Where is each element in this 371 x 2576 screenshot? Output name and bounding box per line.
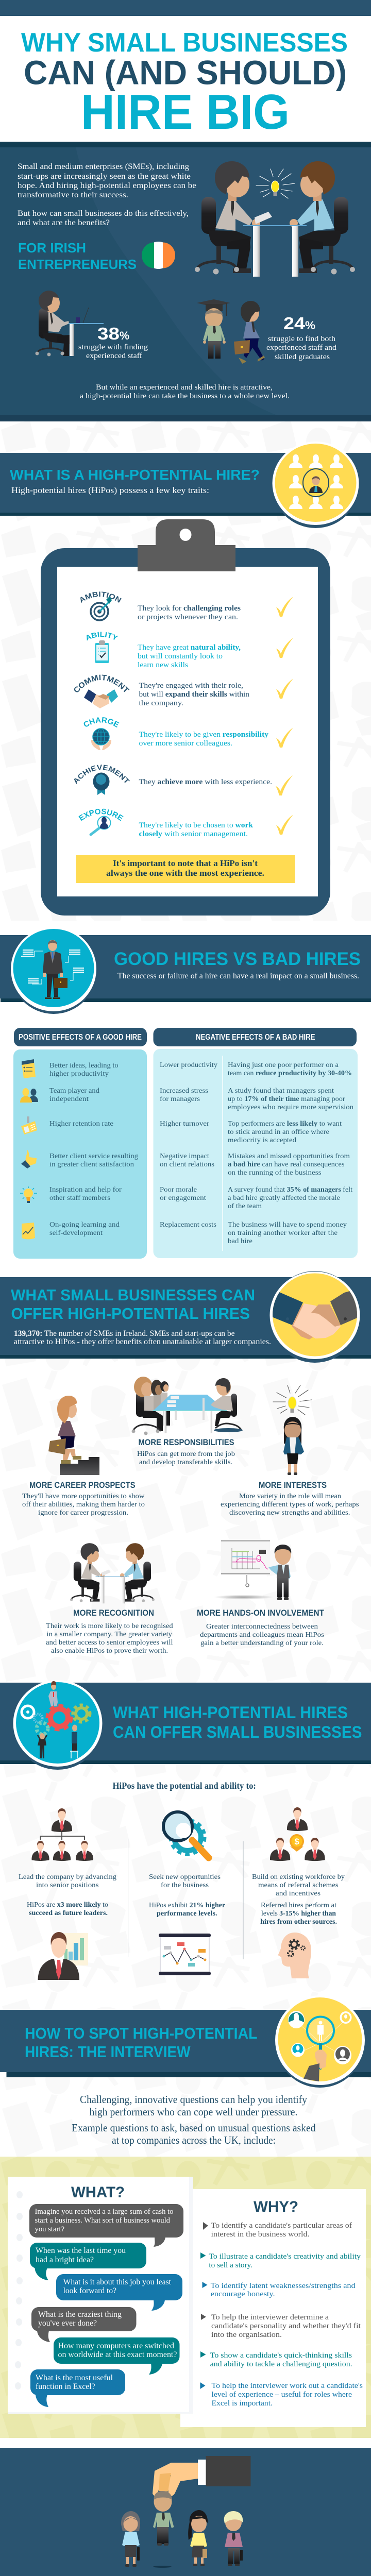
text block: more responsibilities: and develop transferable skills. [139,1459,232,1466]
text block: more recognition [46,1608,173,1655]
icon: line chart board [159,1934,211,1975]
text block: closing intro [80,383,290,400]
trait: commitment: COMMITMENT [74,675,130,692]
text block: negative effect names: Replacement costs [160,1221,216,1229]
heading: what: WHAT? [71,2184,125,2201]
illustration: man at laptop [35,291,104,357]
text block: positive effects [49,1062,138,1237]
trait: charge: over more senior colleagues. [139,739,232,748]
text block: negative effect names: Lower productivity [160,1061,217,1069]
text block: negative effect details: on training another worker after the [228,1229,338,1237]
text block: build: hires from other sources. [260,1918,337,1926]
reason 4: To help the interviewer determine a [211,2313,329,2321]
speech bubble: useful excel function [30,2369,125,2407]
reason 1: interest in the business world. [211,2230,309,2239]
reason 4: candidate's personality and whether they'd fit [211,2322,361,2330]
heading [11,1286,255,1323]
subheading: High-potential hires (HiPos) possess a few key traits: [11,485,209,495]
icon: team [20,1088,38,1103]
text block: more career prospects: They'll have more opportunities to show [22,1493,145,1500]
illustration: woman with idea [273,1385,312,1475]
trait: exposure: They're likely to be chosen to work [139,821,254,829]
panel: conclusion [0,2448,371,2576]
text block: negative effect names: Poor morale [160,1186,197,1194]
text block: seek: Seek new opportunities [149,1873,221,1881]
text block: more hands-on involvement [197,1608,325,1647]
text block: build [252,1873,345,1926]
text block: SME statistic [14,1329,271,1346]
text block: positive effects: independent [49,1095,89,1103]
text block: negative effect names: for managers [160,1095,200,1103]
heading: GOOD HIRES VS BAD HIRES [114,949,361,969]
reason 6 [200,2382,363,2408]
text block: seek: HiPos exhibit 21% higher [149,1902,225,1909]
speech bubble: least look forward to [56,2274,182,2311]
background pattern: interview intro [0,2077,371,2157]
icon badge: businessman with career options [11,927,96,1014]
trait: commitment [74,675,293,708]
reason 6: Excel is important. [211,2399,273,2408]
text block: more interests: More variety in the role will mean [239,1493,341,1500]
text block: negative effect names: on client relations [160,1161,214,1168]
icon: Irish flag [142,242,175,269]
divider lines [128,1839,243,1959]
panel: how to spot high-potential hires header [0,1995,371,2088]
text block: seek [149,1873,225,1918]
stat: 38 percent: experienced staff [86,352,142,360]
text block: more recognition: Their work is more likely to be recognised [46,1622,173,1630]
illustration: presenter at whiteboard [214,1540,291,1600]
figure: grey-haired woman [121,2511,140,2567]
icon: clipboard clip [138,519,235,571]
stat: 38 percent: % [120,329,129,342]
illustration: two men in discussion [70,1543,155,1603]
reason 5: To show a candidate's quick-thinking skills [210,2351,352,2360]
stat: 24 percent: 24 [283,314,306,333]
heading: positive effects: POSITIVE EFFECTS OF A GOOD HIRE [19,1033,142,1042]
text block: more interests [221,1481,359,1517]
text block: more interests: discovering new strengths and abilities. [229,1509,350,1517]
text block: negative effect details: a bad hire can have real consequences [228,1161,344,1168]
title: CAN (AND SHOULD) [24,54,347,92]
speech bubble: craziest thing: What is the craziest thing [38,2310,122,2319]
text block: lead [19,1873,116,1917]
text block: interview intro: high performers who can cope well under pressure. [90,2106,298,2118]
panel: good hires vs bad hires header [0,927,371,1014]
heading [113,1703,362,1741]
trait: commitment: but will expand their skills within [139,690,250,699]
speech bubble: large sum of cash: start a business. What sort of business would [35,2216,170,2225]
heading: OFFER HIGH-POTENTIAL HIRES [11,1304,250,1323]
column: build on existing workforce [252,1807,345,1978]
text block: more recognition: MORE RECOGNITION [73,1608,154,1618]
text block: seek: for the business [161,1882,209,1889]
text block: closing intro: a high-potential hire can take the business to a whole new level. [80,392,290,400]
trait: ability: but will constantly look to [138,652,223,660]
trait: exposure: EXPOSURE [78,809,124,821]
heading: WHAT IS A HIGH-POTENTIAL HIRE? [10,467,260,483]
text block: intro paragraph: Small and medium enterprises (SMEs), including [18,162,189,171]
text block: more career prospects: off their abilities, making them harder to [22,1501,145,1509]
text block: intro paragraph: But how can small businesses do this effectively, [18,209,189,218]
trait: ability: ABILITY [87,632,119,641]
text block: lead: into senior positions [36,1882,99,1889]
title: HIRE BIG [81,84,290,140]
trait: exposure [78,809,293,838]
icon: hierarchy [31,1808,93,1861]
reason 3: To identify latent weaknesses/strengths and [211,2282,356,2290]
background pattern: potential section [0,1764,371,2010]
column: lead the company [19,1808,116,1980]
text block: positive effects: Better client service resulting [49,1153,138,1160]
panel: negative effects [154,1028,358,1258]
trait: achievement: ACHIEVEMENT [74,765,130,784]
speech bubble: useful excel function: function in Excel? [36,2382,95,2391]
panel: why paper [180,2189,366,2427]
text block: interview intro [72,2093,316,2146]
speech bubble: bright idea: When was the last time you [36,2246,126,2255]
text block: more recognition: and better access to senior employees will [46,1639,173,1647]
subheading: The success or failure of a hire can have a real impact on a small business. [117,972,359,980]
reason 5: and ability to tackle a challenging question. [210,2360,352,2368]
stat: 24 percent: experienced staff and [266,344,337,352]
panel: what small businesses can offer header [0,1271,371,1363]
heading: WHAT SMALL BUSINESSES CAN [11,1286,255,1304]
illustration: woman climbing stairs [48,1396,99,1475]
illustration: two men at a table with lightbulb [195,161,355,277]
text block: intro paragraph: transformative to their success. [18,191,128,199]
text block: negative effect details: on the running of the business [228,1169,322,1177]
icon badge: handshake [268,1271,361,1363]
reason 4: into the organisation. [211,2331,282,2339]
stat: 24 percent: struggle to find both [268,335,336,343]
text block: negative effect details: employees who require more supervision [228,1104,353,1111]
reason 2: To illustrate a candidate's creativity and ability [209,2252,361,2261]
icon: leader with bar chart [38,1932,88,1980]
text block: negative effect details: bad hire [228,1238,252,1245]
panel: clipboard of key traits [41,519,330,916]
reason 6: level of experience – useful for roles where [211,2391,352,2399]
background pattern: benefits section [0,1359,371,1683]
text block: negative effect details: A survey found that 35% of managers felt [228,1186,352,1194]
icon badge: magnifier on candidates [275,1995,365,2088]
icon badge: team and gears [13,1680,102,1770]
speech bubble: large sum of cash [29,2204,183,2247]
text block: more career prospects: MORE CAREER PROSPECTS [29,1481,136,1490]
reason 2: to sell a story. [209,2261,252,2269]
text block: closing intro: But while an experienced and skilled hire is attractive, [96,383,273,392]
speech bubble: least look forward to: What is it about this job you least [63,2278,172,2286]
text block: more interests: MORE INTERESTS [259,1481,327,1490]
text block: negative effect details [228,1061,353,1245]
callout: HiPo note [76,855,295,883]
text block: negative effect names [160,1061,217,1229]
heading: for Irish entrepreneurs [18,240,137,272]
reason 4 [201,2313,361,2339]
text block: intro paragraph [18,162,196,227]
text block: negative effect details: mediocrity is accepted [228,1137,296,1144]
text block: more career prospects: ignore for career progression. [38,1509,128,1517]
speech bubble: computers switched on [54,2337,179,2375]
text block: positive effects: Inspiration and help for [49,1186,122,1194]
text block: negative effect names: Increased stress [160,1087,208,1095]
reason 6: To help the interviewer work out a candidate's [211,2382,363,2390]
column: seek new opportunities [149,1812,225,1975]
icon: magnifier over gear [163,1812,209,1858]
text block: negative effect details: to stick around in an office where [228,1128,329,1136]
icon: growth chart [22,1223,35,1240]
text block: build: levels 3-15% higher than [261,1910,336,1918]
figure: blond man [224,2511,243,2566]
text block: negative effect names: Higher turnover [160,1120,209,1128]
trait: ambition [80,591,293,621]
text block: intro paragraph: hope. And hiring high-potential employees can be [18,181,196,190]
text block: positive effects: in greater client satisfaction [49,1161,134,1168]
text block: more hands-on involvement: Greater interconnectedness between [206,1623,318,1631]
text block: interview intro: Example questions to ask, based on unusual questions asked [72,2122,316,2134]
trait: ability: learn new skills [138,661,188,669]
stat: 24 percent: skilled graduates [275,353,330,361]
text block: negative effect details: of the team [228,1202,262,1210]
figure: woman with headset [188,2510,208,2566]
text block: lead: succeed as future leaders. [29,1909,108,1917]
trait: commitment: They're engaged with their role, [139,682,243,690]
reason 3 [202,2282,356,2298]
text block: more responsibilities: HiPos can get more from the job [137,1450,235,1458]
text block: positive effects: self-development [49,1229,103,1237]
speech bubble: bright idea [30,2243,146,2280]
heading: for Irish entrepreneurs: ENTREPRENEURS [18,257,137,272]
text block: more responsibilities [137,1437,235,1466]
heading: HIRES: THE INTERVIEW [25,2043,191,2061]
heading: for Irish entrepreneurs: FOR IRISH [18,240,86,256]
icon badge: chosen candidate [272,442,359,528]
text block: interview intro: Challenging, innovative questions can help you identify [80,2093,307,2106]
speech bubble: large sum of cash: Imagine you received a a large sum of cash to [35,2208,173,2216]
icon: referral group: $ [294,1837,299,1846]
text block: build: and incentives [276,1890,321,1897]
icon: referral group [270,1807,325,1861]
text block: more hands-on involvement: MORE HANDS-ON INVOLVEMENT [197,1608,325,1618]
panel: what and why questions [0,2157,371,2438]
text block: interview intro: at top companies across the UK, include: [112,2134,276,2146]
icon: head with gears [278,1933,311,1978]
text block: more hands-on involvement: gain a better understanding of your role. [200,1639,324,1647]
trait: achievement: They achieve more with less experience. [139,778,272,786]
callout: HiPo note: It's important to note that a HiPo isn't [113,858,258,868]
stat: 38 percent [78,324,148,360]
figure: lifted candidate [153,2491,174,2568]
speech bubble: bright idea: had a bright idea? [36,2256,94,2264]
text block: build: Build on existing workforce by [252,1873,345,1881]
panel: intro [0,142,371,421]
panel: what is a high-potential hire header [0,442,371,528]
text block: lead: HiPos are x3 more likely to [27,1901,108,1909]
text block: build: Referred hires perform at [261,1902,336,1909]
trait: ambition: AMBITION [80,591,122,603]
text block: lead: Lead the company by advancing [19,1873,116,1881]
subheading: HiPos potential: HiPos have the potential and ability to: [112,1781,256,1791]
stat: 24 percent: % [305,319,315,332]
text block: negative effect details: Having just one poor performer on a [228,1061,339,1069]
text block: more recognition: also enable HiPos to prove their worth. [51,1647,168,1655]
illustration: graduate [197,299,230,359]
panel: what high-potential hires can offer header [0,1680,371,1770]
text block: negative effect names: Negative impact [160,1153,209,1160]
trait: achievement [74,765,293,795]
heading [25,2024,258,2061]
reason 1: To identify a candidate's particular areas of [211,2222,352,2230]
stat: 24 percent [266,314,337,361]
reason 1 [203,2222,352,2239]
trait: charge [83,717,293,750]
text block: more recognition: in a smaller company. The greater variety [46,1631,172,1638]
text block: negative effect details: Top performers are less likely to want [228,1120,342,1128]
text block: SME statistic: 139,370: The number of SMEs in Ireland. SMEs and start-ups can be [14,1329,235,1338]
text block: negative effect details: The business will have to spend money [228,1221,347,1229]
panel: hero title [0,0,371,140]
text block: negative effect names: or engagement [160,1194,206,1202]
speech bubble: craziest thing [31,2307,136,2342]
text block: negative effect details: Mistakes and missed opportunities from [228,1153,350,1160]
text block: negative effect details: A study found that managers spent [228,1087,334,1095]
reason 2 [200,2252,361,2269]
heading: why: WHY? [254,2198,298,2215]
text block: seek: performance levels. [157,1910,217,1918]
speech bubble: computers switched on: on worldwide at this exact moment? [58,2350,177,2359]
speech bubble: large sum of cash: you start? [35,2225,64,2233]
speech bubble: least look forward to: look forward to? [63,2286,116,2295]
title [21,28,348,140]
text block: positive effects: Team player and [49,1087,99,1095]
callout: HiPo note: always the one with the most experience. [106,868,264,878]
title: WHY SMALL BUSINESSES [21,28,348,58]
text block: more career prospects [22,1481,145,1517]
icon: lightbulb [20,1187,37,1203]
text block: more responsibilities: MORE RESPONSIBILITIES [138,1437,234,1447]
icon: ID badge [21,1116,37,1134]
stat: 38 percent: struggle with finding [78,343,148,351]
text block: build: means of referral schemes [258,1882,339,1889]
trait: charge: CHARGE [83,717,120,727]
illustration: hand picking candidate from group [121,2456,250,2568]
text block: SME statistic: attractive to HiPos - they offer benefits often unattainable at larger companies. [14,1337,271,1346]
trait: ability: They have great natural ability, [138,643,241,652]
illustration: meeting table [132,1377,243,1435]
panel: positive effects [13,1028,147,1259]
trait: charge: They're likely to be given responsibility [139,731,269,739]
heading: negative effects: NEGATIVE EFFECTS OF A BAD HIRE [196,1033,315,1042]
heading: HOW TO SPOT HIGH-POTENTIAL [25,2024,258,2042]
trait: exposure: closely with senior management. [139,830,248,838]
reason 3: encourage honesty. [211,2290,275,2298]
panel: what paper [8,2177,193,2414]
stat: 38 percent: 38 [97,324,120,343]
illustration: professional with briefcase [234,301,265,364]
speech bubble: useful excel function: What is the most useful [36,2374,113,2382]
icon: notepad [22,1059,36,1078]
text block: positive effects: On-going learning and [49,1221,120,1229]
trait: ambition: or projects whenever they can. [138,613,238,621]
trait: ability [87,632,293,669]
heading: WHAT HIGH-POTENTIAL HIRES [113,1703,348,1722]
text block: positive effects: higher productivity [49,1070,109,1078]
icon: thumbs up [21,1150,37,1168]
text block: negative effect details: team can reduce productivity by 30-40% [228,1070,352,1077]
text block: intro paragraph: start-ups are increasingly seen as the great white [18,172,191,181]
trait: commitment: the company. [139,699,183,707]
speech bubble: craziest thing: you've ever done? [38,2319,97,2328]
text block: negative effect details: up to 17% of their time managing poor [228,1095,345,1103]
text block: positive effects: other staff members [49,1194,110,1202]
text block: more hands-on involvement: departments and colleagues mean HiPos [200,1631,324,1639]
trait: ambition: They look for challenging roles [138,604,241,613]
text block: positive effects: Better ideas, leading to [49,1062,119,1070]
reason 5 [200,2351,352,2368]
speech bubble: computers switched on: How many computers are switched [58,2342,174,2350]
text block: negative effect details: a bad hire greatly affected the morale [228,1194,340,1202]
text block: positive effects: Higher retention rate [49,1120,113,1128]
text block: more interests: experiencing different types of work, perhaps [221,1501,359,1509]
background pattern: clipboard section [0,421,371,921]
text block: intro paragraph: and what are the benefits? [18,218,110,227]
